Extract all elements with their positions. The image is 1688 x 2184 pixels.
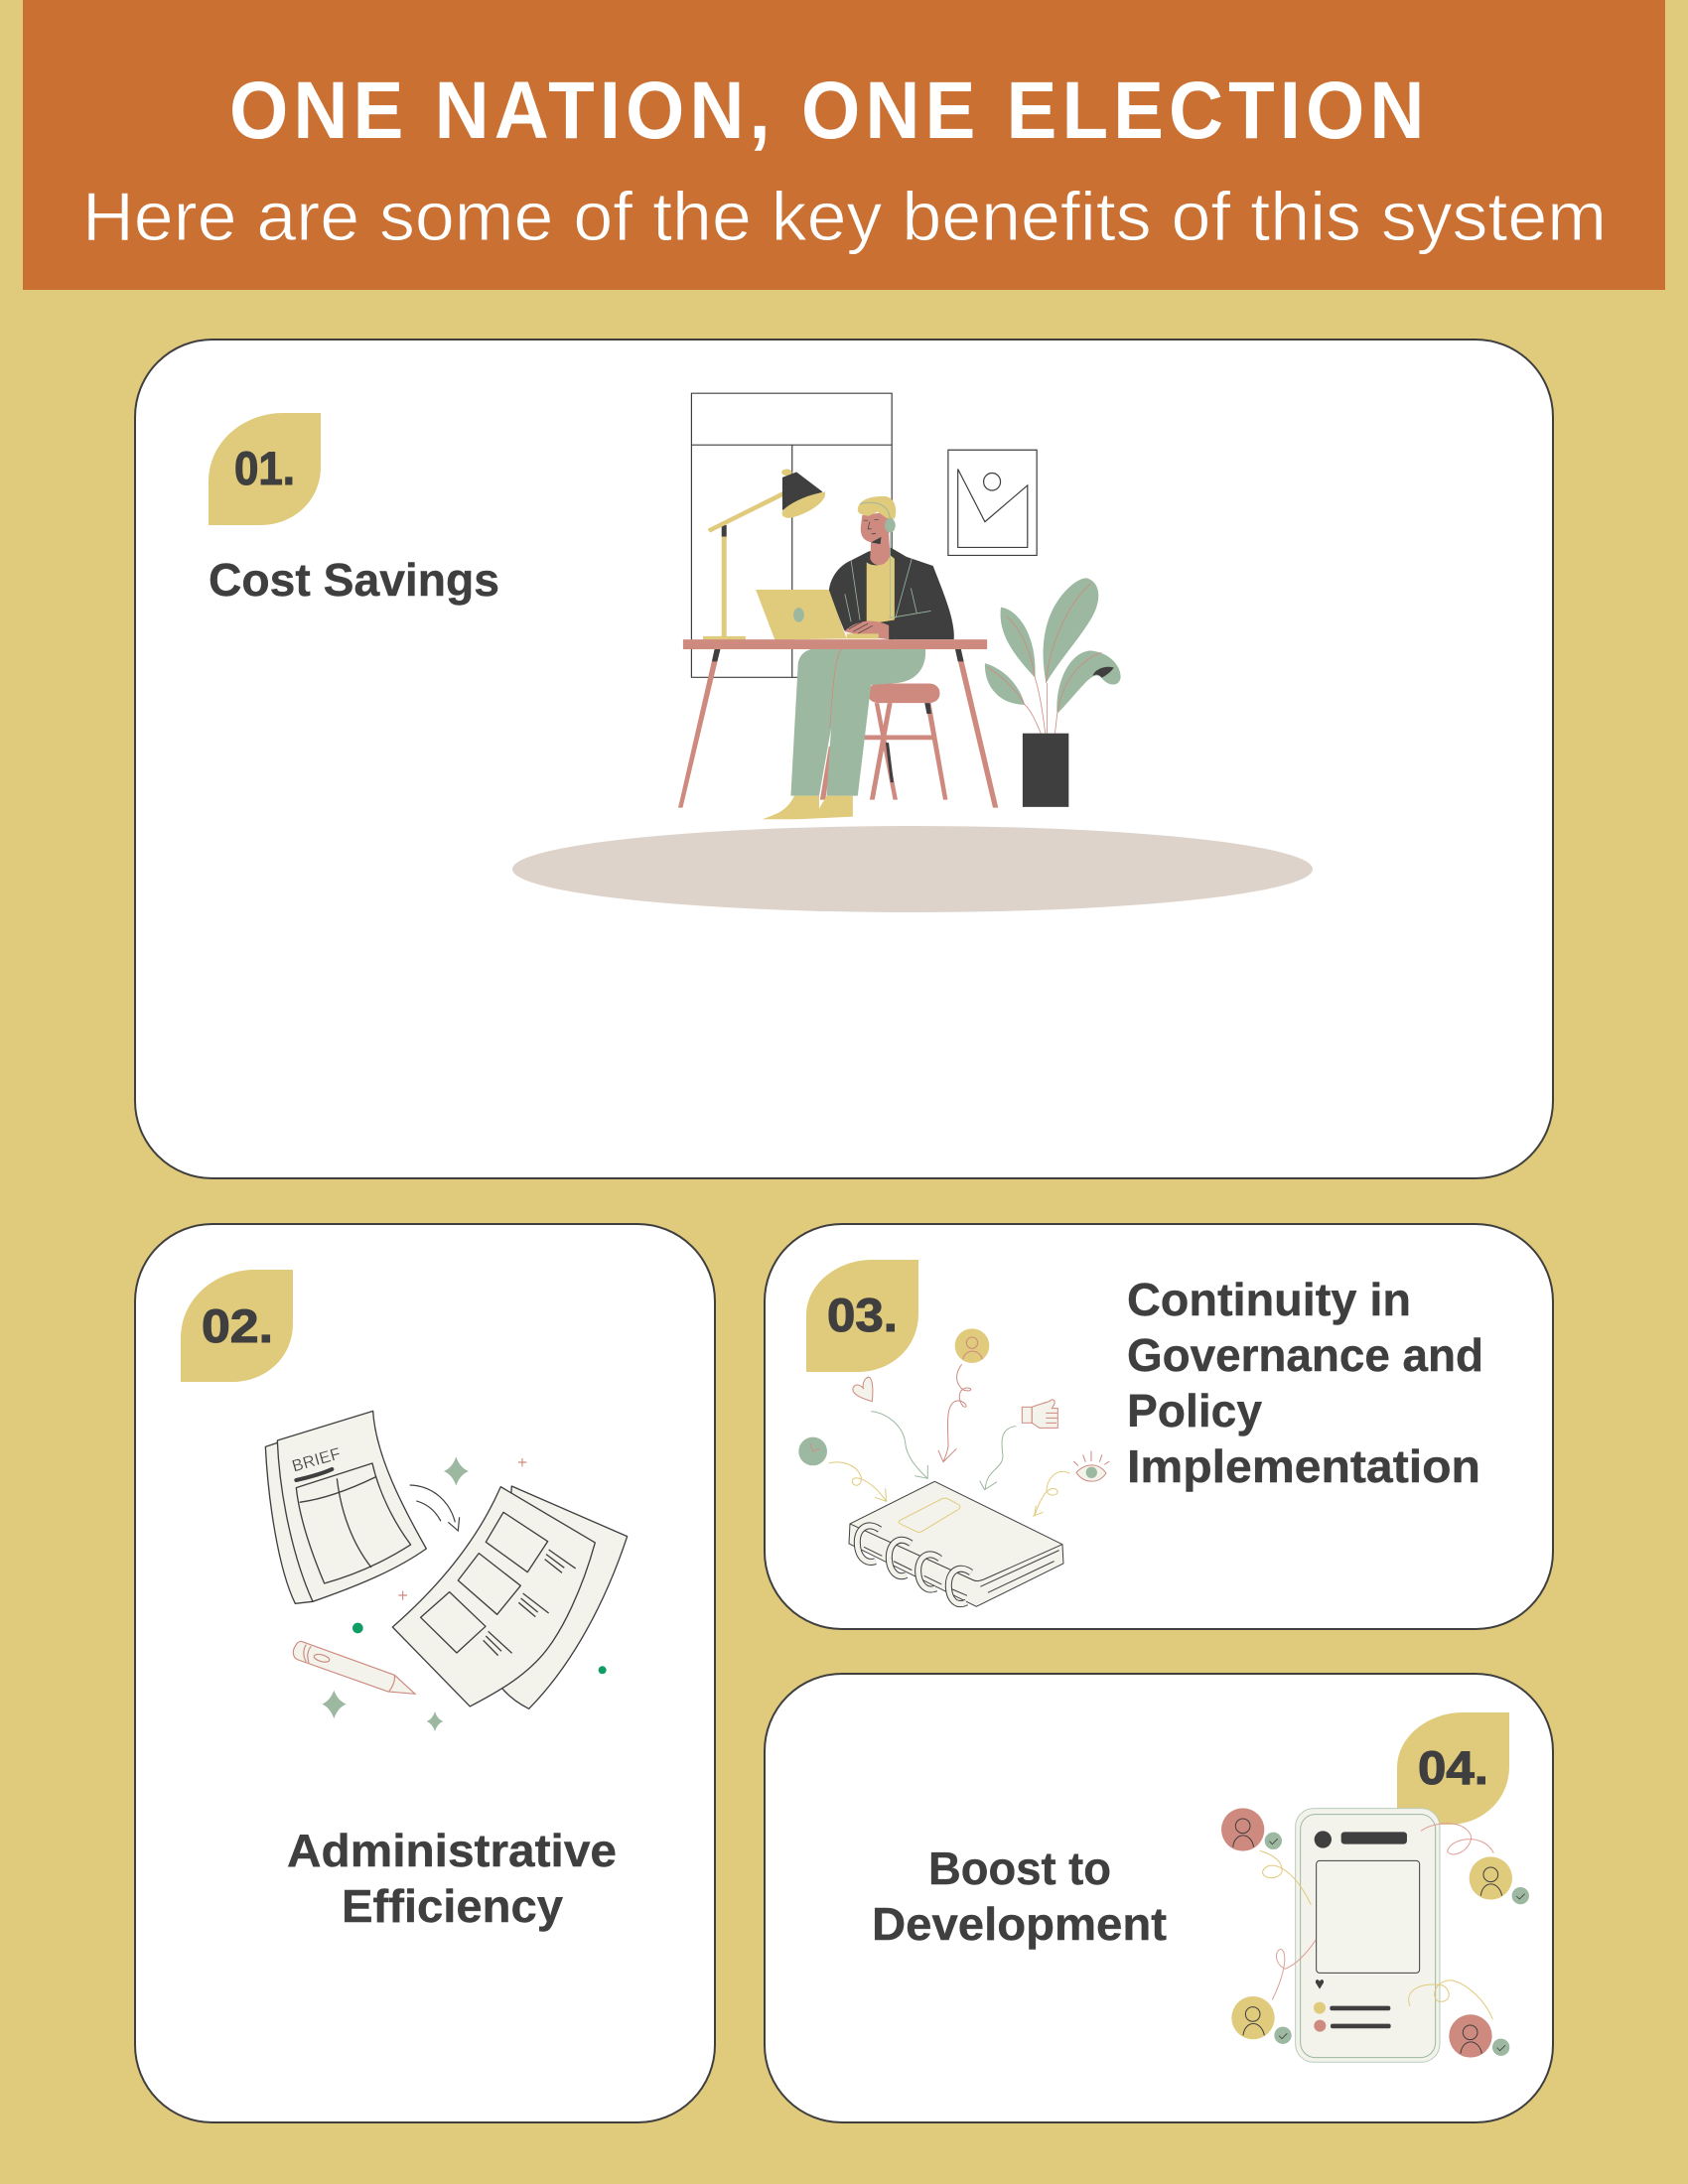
- badge 01: 01.: [234, 442, 295, 494]
- heading: continuity in governance: Policy: [1127, 1385, 1262, 1436]
- heading: continuity in governance: Governance and: [1127, 1329, 1483, 1381]
- icon: clock: [798, 1437, 827, 1465]
- header banner: [23, 0, 1665, 290]
- user: top right: [1470, 1856, 1529, 1904]
- badge 02: [181, 1270, 293, 1382]
- heading: boost to development: [872, 1843, 1167, 1950]
- title: ONE NATION, ONE ELECTION: [229, 64, 1424, 156]
- window: [691, 393, 892, 677]
- badge 03: 03.: [827, 1289, 898, 1341]
- pencil: [293, 1641, 415, 1694]
- subtitle: Here are some of the key benefits of this system: [82, 178, 1607, 255]
- person: [763, 496, 954, 819]
- badge 01: [209, 413, 321, 525]
- icon: thumbs up: [1022, 1400, 1057, 1428]
- badge 04: [1397, 1712, 1509, 1825]
- desk lamp: [703, 470, 825, 640]
- dots: [352, 1623, 607, 1674]
- heading: boost to development: Development: [872, 1898, 1167, 1950]
- illustration: ring binder with icons: [798, 1328, 1109, 1606]
- binder: [849, 1481, 1063, 1606]
- badge 03: [806, 1260, 918, 1372]
- stool: [820, 684, 947, 800]
- user: bottom right: [1449, 2014, 1509, 2058]
- heading: boost to development: Boost to: [928, 1843, 1111, 1894]
- laptop: [756, 590, 847, 640]
- heading: administrative efficiency: [287, 1825, 617, 1932]
- heading: administrative efficiency: Efficiency: [342, 1880, 563, 1932]
- icon: eye: [1073, 1451, 1109, 1481]
- panel: continuity in governance: [765, 1224, 1553, 1629]
- icon: user: [955, 1328, 989, 1363]
- panel: administrative efficiency: [135, 1224, 715, 2122]
- curved arrows: [829, 1364, 1069, 1516]
- plus marks: [398, 1458, 526, 1600]
- user: bottom left: [1231, 1996, 1292, 2044]
- potted plant: [985, 578, 1121, 807]
- desk: [678, 639, 998, 808]
- phone: [1296, 1809, 1440, 2062]
- icon: heart: [853, 1377, 873, 1402]
- sparkles: [322, 1456, 469, 1731]
- illustration: person working at a desk: [678, 393, 1121, 819]
- heading: administrative efficiency: Administrative: [287, 1825, 617, 1876]
- heading: continuity in governance: Implementation: [1127, 1440, 1480, 1492]
- heading: cost savings: Cost Savings: [209, 554, 499, 606]
- heading: continuity in governance: [1127, 1274, 1483, 1492]
- illustration: documents and pencil: [265, 1411, 628, 1731]
- wall picture: [948, 450, 1037, 555]
- panel: cost savings: [135, 340, 1553, 1178]
- arrow between documents: [410, 1485, 460, 1531]
- badge 04: 04.: [1418, 1741, 1488, 1794]
- floor shadow: [512, 826, 1313, 912]
- binder label: [899, 1498, 960, 1532]
- illustration: phone with users: [1221, 1808, 1529, 2062]
- connection squiggles: [1260, 1824, 1493, 2019]
- layout document: [392, 1486, 628, 1708]
- heading: continuity in governance: Continuity in: [1127, 1274, 1411, 1325]
- badge 02: 02.: [202, 1299, 273, 1352]
- panel: boost to development: [765, 1674, 1553, 2122]
- user: top left: [1221, 1808, 1282, 1851]
- binder rings: [857, 1526, 971, 1604]
- brief label: BRIEF: [290, 1443, 343, 1476]
- brief document: [265, 1411, 426, 1603]
